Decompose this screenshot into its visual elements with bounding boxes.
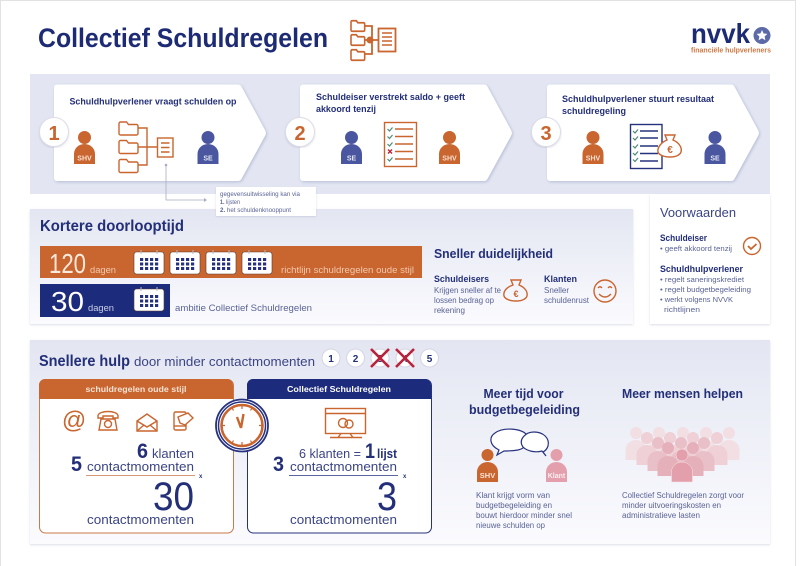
icon: at sign: @ <box>62 407 86 434</box>
calculation: collectief: lijst <box>377 447 398 461</box>
text: klant krijgt vorm: Klant krijgt vorm van <box>476 491 550 500</box>
callout: gegevensuitwisseling: gegevensuitwisseling kan via <box>220 191 301 198</box>
heading: snellere hulp <box>39 353 315 370</box>
text: klanten <box>544 274 590 305</box>
panel: voorwaarden: Schuldhulpverlener <box>660 264 743 274</box>
text: schuldeisers: rekening <box>434 306 465 315</box>
calculation: old style: 30 <box>153 475 194 519</box>
title: Collectief Schuldregelen <box>38 23 328 53</box>
contact moment numbers: 1 <box>328 354 334 365</box>
card: schuldregelen oude stijl <box>39 379 234 533</box>
panel: voorwaarden: richtlijnen <box>664 305 700 314</box>
icon: money bag: € <box>513 289 519 299</box>
step 2: 2 <box>294 123 306 145</box>
heading: kortere doorlooptijd: Kortere doorlooptijd <box>40 218 184 235</box>
contact moment numbers: 2 <box>353 354 359 365</box>
calculation: old style: 5 <box>71 453 82 476</box>
step 1: SHV <box>77 156 92 162</box>
logo: nvvk: nvvk <box>691 18 750 49</box>
calculation: collectief: contactmomenten <box>290 513 397 527</box>
step 3: € <box>667 145 673 156</box>
text: collectief schuldregelen zorgt: administratieve lasten <box>622 511 700 520</box>
text: klant krijgt vorm: budgetbegeleiding en <box>476 501 552 510</box>
panel: voorwaarden: • regelt budgetbegeleiding <box>660 285 751 294</box>
bar: 120 dagen <box>40 246 422 279</box>
step 3 <box>532 84 759 181</box>
card: collectief schuldregelen <box>247 379 432 533</box>
icon: smiley <box>594 280 616 302</box>
panel: voorwaarden: • regelt saneringskrediet <box>660 275 745 284</box>
icon: money bag <box>504 280 527 301</box>
step 1 <box>40 84 266 181</box>
step 1: Schuldhulpverlener vraagt schulden op <box>70 96 237 106</box>
block: meer tijd voor budgetbegeleiding: budgetbegeleiding <box>469 402 580 417</box>
text: klant krijgt vorm <box>476 491 572 530</box>
person: SHV: SHV <box>480 471 495 480</box>
step 3: SE <box>710 156 720 162</box>
step 2: SHV <box>442 156 457 162</box>
calculation: old style: contactmomenten <box>87 460 194 474</box>
bar: 120 dagen: dagen <box>90 265 116 275</box>
text: klanten: Klanten <box>544 274 577 284</box>
bar: 30 dagen <box>40 284 312 317</box>
calculation: old style: contactmomenten <box>87 513 194 527</box>
icon: clock <box>216 400 268 452</box>
calculation: collectief: 3 <box>377 475 397 519</box>
step 2: SE <box>347 156 356 162</box>
callout: gegevensuitwisseling <box>165 164 316 216</box>
step 2: akkoord tenzij <box>316 104 376 114</box>
icon: check <box>744 238 760 254</box>
bar: 120 dagen: richtlijn schuldregelen oude stijl <box>281 265 414 276</box>
text: klant krijgt vorm: nieuwe schulden op <box>476 521 546 530</box>
step 3: schuldregeling <box>562 106 626 116</box>
heading: sneller duidelijkheid: Sneller duidelijkheid <box>434 246 553 261</box>
calculation: old style: x <box>199 474 203 480</box>
block: meer tijd voor budgetbegeleiding <box>469 386 580 530</box>
text: schuldeisers: Krijgen sneller af te <box>434 286 502 295</box>
panel: voorwaarden: Voorwaarden <box>660 205 736 220</box>
calculation: collectief <box>273 440 407 527</box>
heading: snellere hulp: Snellere hulp <box>39 353 130 370</box>
panel: voorwaarden: Schuldeiser <box>660 233 707 243</box>
contact moment numbers <box>322 349 438 367</box>
block: meer tijd voor budgetbegeleiding: Meer tijd voor <box>484 386 564 401</box>
icon: envelope <box>137 414 157 431</box>
text: collectief schuldregelen zorgt: minder uitvoeringskosten en <box>622 501 721 510</box>
block: meer mensen helpen: Meer mensen helpen <box>622 386 743 401</box>
step 1: 1 <box>48 123 60 145</box>
text: klanten: Sneller <box>544 286 569 295</box>
calculation: collectief: 6 klanten = <box>299 447 361 461</box>
icon: mobile device <box>174 412 193 430</box>
calculation: collectief: 1 <box>365 440 375 463</box>
person: Klant <box>546 449 567 482</box>
logo: nvvk: financiële hulpverleners <box>691 46 771 54</box>
text: schuldeisers: Schuldeisers <box>434 274 489 284</box>
bar: 30 dagen: 30 <box>51 286 84 317</box>
icon: telephone <box>98 412 118 430</box>
panel: process steps <box>30 74 770 194</box>
text: collectief schuldregelen zorgt: Collectief Schuldregelen zorgt voor <box>622 491 744 500</box>
contact moment numbers: 4 <box>402 354 408 365</box>
bar: 30 dagen: dagen <box>88 303 114 313</box>
heading: snellere hulp: door minder contactmomenten <box>134 354 315 369</box>
text: collectief schuldregelen zorgt <box>622 491 744 520</box>
calculation: collectief: x <box>403 474 407 480</box>
text: schuldeisers <box>434 274 502 315</box>
bar: 120 dagen: 120 <box>49 248 86 279</box>
icon: monitor <box>326 408 366 438</box>
step 3: 3 <box>540 123 552 145</box>
logo: nvvk <box>691 18 771 54</box>
calculation: collectief: contactmomenten <box>290 460 397 474</box>
text: klant krijgt vorm: bouwt hierdoor minder snel <box>476 511 572 520</box>
panel: voorwaarden: • geeft akkoord tenzij <box>660 244 732 253</box>
person: SHV <box>477 449 498 482</box>
panel: voorwaarden <box>650 194 770 324</box>
calculation: old style: 6 <box>137 440 148 463</box>
callout: gegevensuitwisseling: 2. het schuldenknooppunt <box>220 207 291 214</box>
callout: gegevensuitwisseling: 1. lijsten <box>220 199 240 206</box>
icon: speech bubbles <box>491 429 548 456</box>
text: schuldeisers: lossen bedrag op <box>434 296 495 305</box>
panel: kortere doorlooptijd <box>30 209 633 324</box>
bar: 30 dagen: ambitie Collectief Schuldregelen <box>175 303 312 314</box>
icon: crowd <box>626 427 740 482</box>
card: collectief schuldregelen: Collectief Schuldregelen <box>287 384 391 394</box>
step 2: Schuldeiser verstrekt saldo + geeft <box>316 92 465 102</box>
block: meer mensen helpen <box>622 386 744 520</box>
contact moment numbers: 3 <box>377 354 383 365</box>
card: schuldregelen oude stijl: schuldregelen oude stijl <box>86 384 186 394</box>
step 2 <box>286 84 512 181</box>
contact moment numbers: 5 <box>427 354 433 365</box>
step 1: SE <box>203 156 213 162</box>
calculation: old style: klanten <box>152 447 194 461</box>
panel: voorwaarden: • werkt volgens NVVK <box>660 295 733 304</box>
person: Klant: Klant <box>548 473 566 480</box>
panel: snellere hulp <box>30 340 770 544</box>
text: klanten: schuldenrust <box>544 296 590 305</box>
icon: folders to document <box>351 21 396 60</box>
step 3: Schuldhulpverlener stuurt resultaat <box>562 94 714 104</box>
calculation: collectief: 3 <box>273 453 284 476</box>
step 3: SHV <box>586 156 601 162</box>
calculation: old style <box>71 440 203 527</box>
